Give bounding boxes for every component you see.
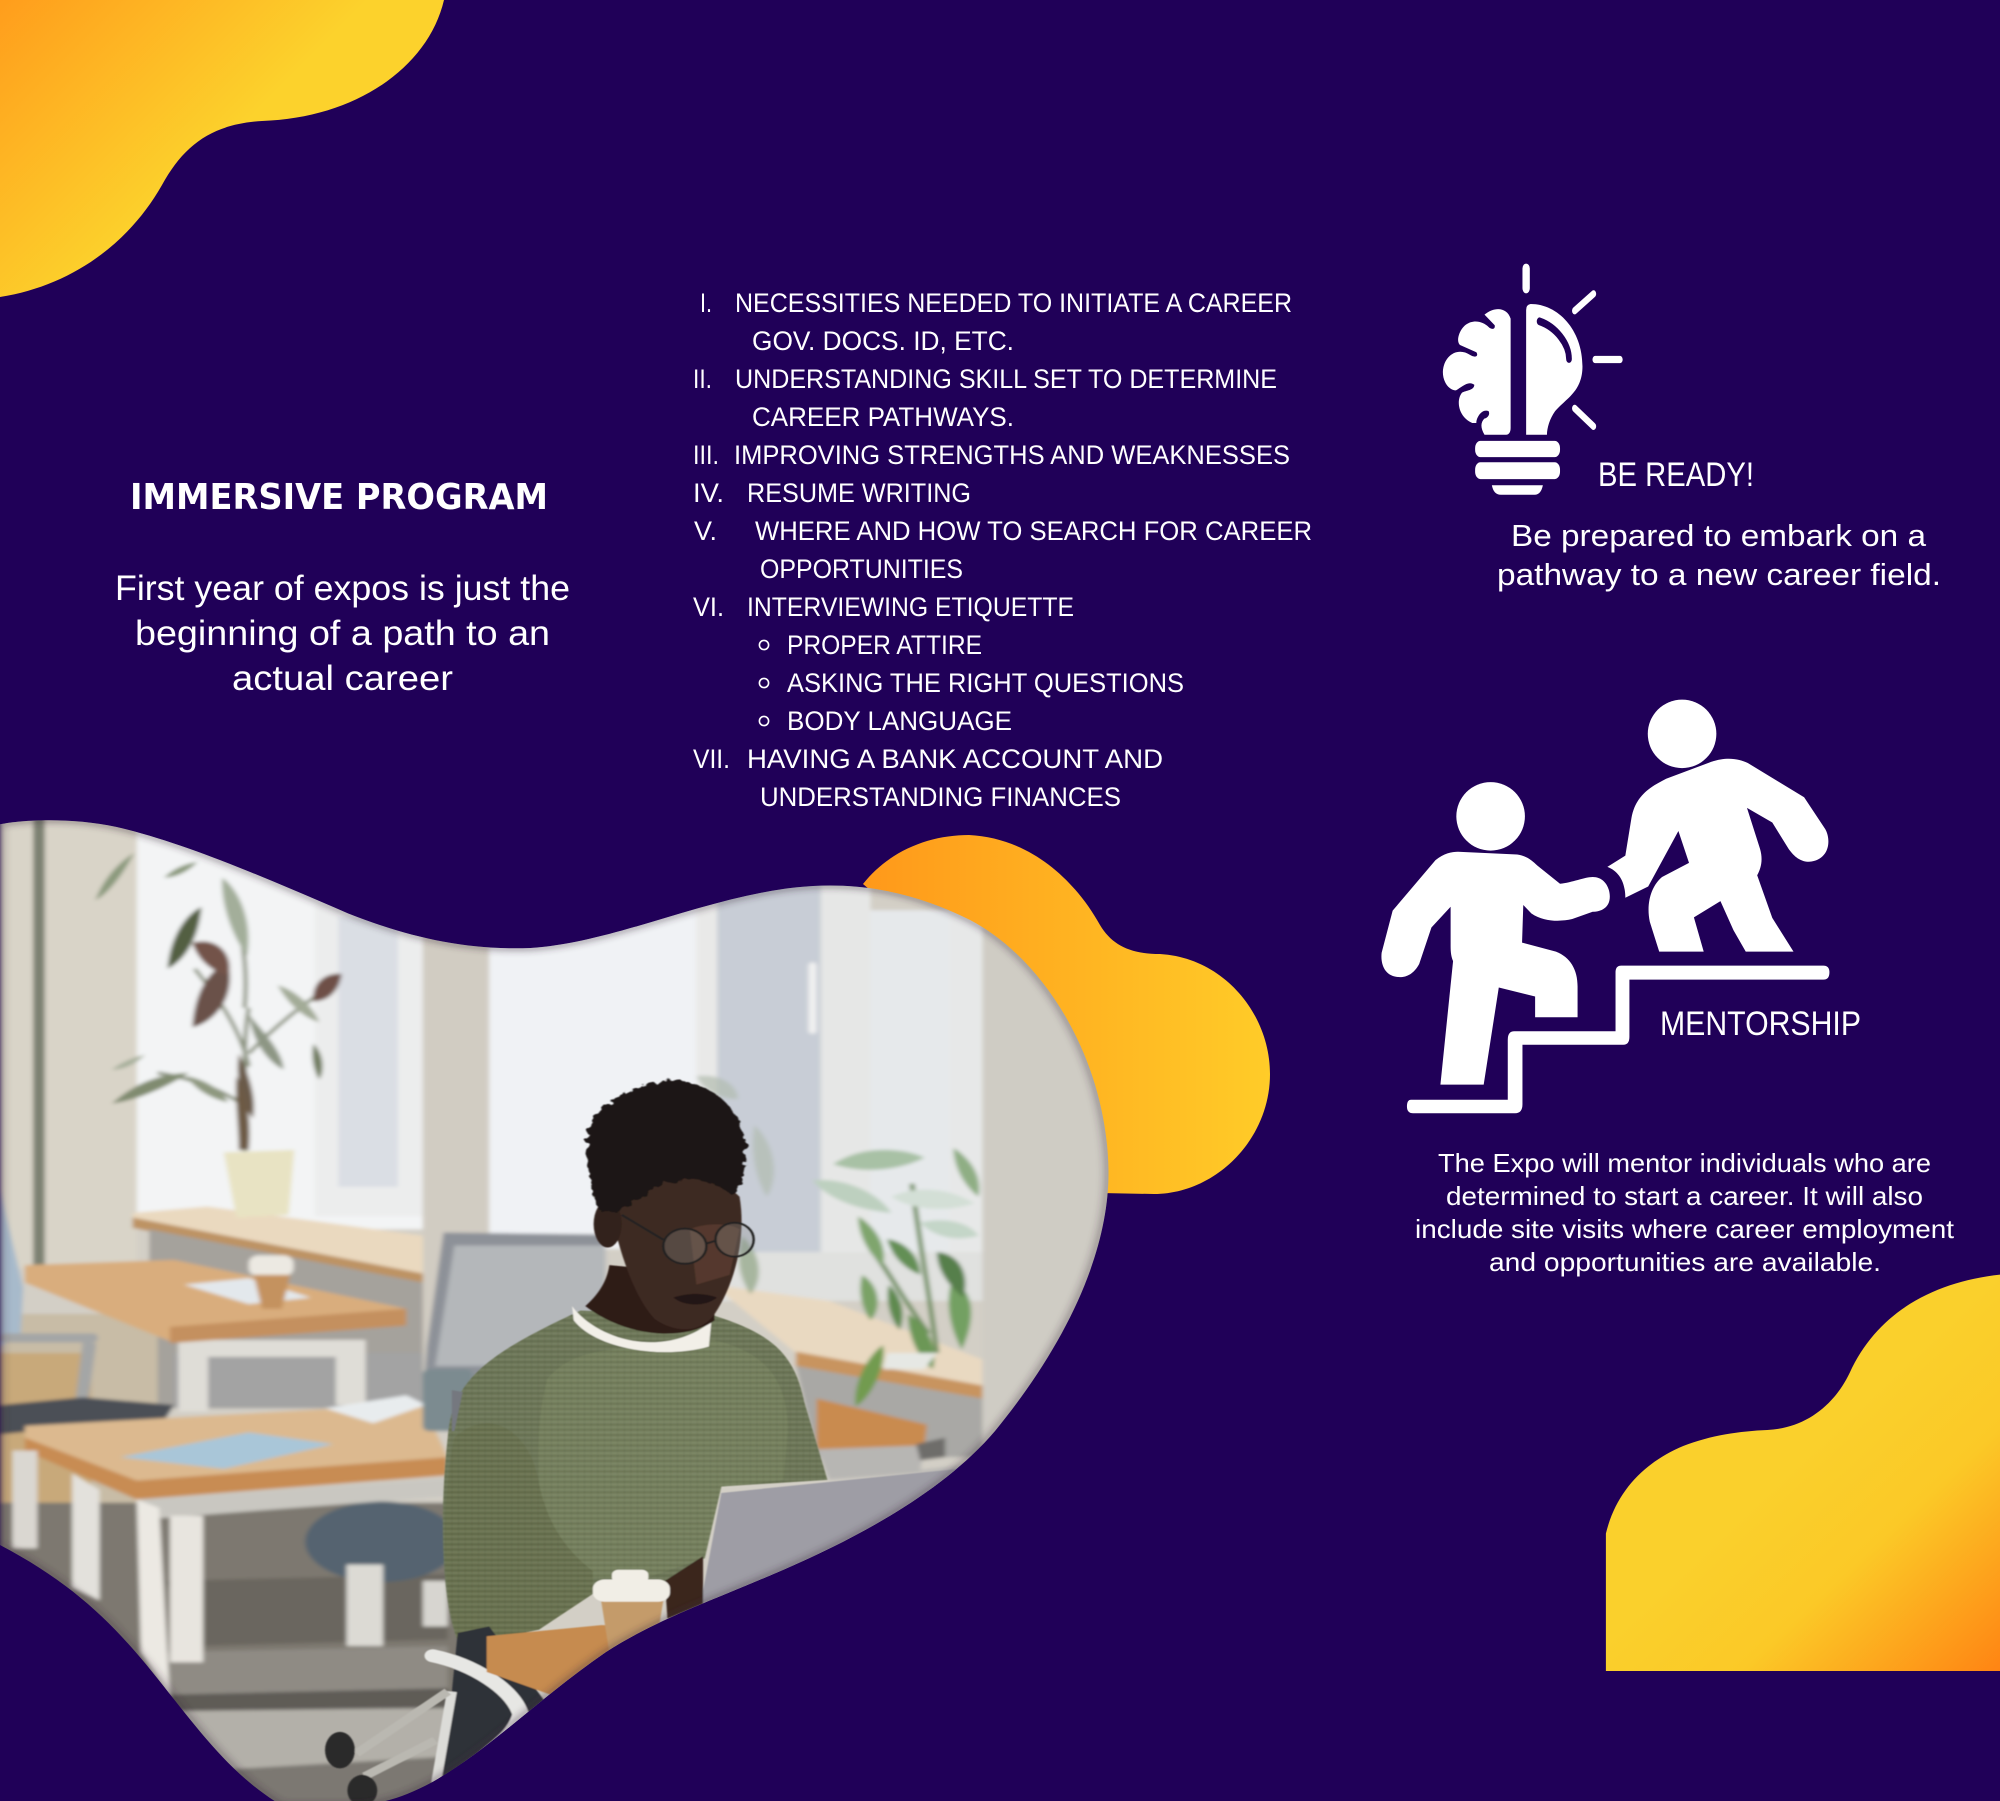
numbered list: career topics: VI. bbox=[693, 592, 724, 622]
label: mentorship: MENTORSHIP bbox=[1660, 1005, 1861, 1043]
numbered list: career topics: BODY LANGUAGE bbox=[787, 706, 1012, 736]
photo: soft inner edge shadow bbox=[0, 820, 1109, 1801]
numbered list: career topics: NECESSITIES NEEDED TO INITIATE A CAREER bbox=[735, 288, 1292, 318]
text block: mentorship description: include site visits where career employment bbox=[1415, 1214, 1955, 1244]
text block: mentorship description: The Expo will mentor individuals who are bbox=[1438, 1148, 1931, 1178]
text block: first year description: actual career bbox=[232, 659, 453, 698]
text block: be prepared: Be prepared to embark on a bbox=[1511, 518, 1927, 553]
text block: first year description: First year of expos is just the bbox=[115, 569, 570, 608]
numbered list: career topics: PROPER ATTIRE bbox=[787, 630, 982, 660]
numbered list: career topics: GOV. DOCS. ID, ETC. bbox=[752, 326, 1014, 356]
photo detail: man's sweater bbox=[443, 1311, 827, 1646]
numbered list: career topics: VII. bbox=[693, 744, 730, 774]
numbered list: career topics: ASKING THE RIGHT QUESTIONS bbox=[787, 668, 1184, 698]
photo detail: coffee cup bbox=[600, 1600, 664, 1650]
decorative blob: bottom right bbox=[1606, 1275, 2000, 1671]
numbered list: career topics: V. bbox=[694, 516, 717, 546]
label: be ready: BE READY! bbox=[1598, 456, 1754, 494]
numbered list: career topics: OPPORTUNITIES bbox=[760, 554, 963, 584]
photo detail: man's neck and collar bbox=[572, 1306, 711, 1352]
photo detail: office chair behind the desk bbox=[439, 1626, 547, 1786]
text block: mentorship description: and opportunities are available. bbox=[1489, 1247, 1881, 1277]
numbered list: career topics: WHERE AND HOW TO SEARCH FOR CAREER bbox=[755, 516, 1312, 546]
numbered list: career topics bbox=[693, 288, 1312, 812]
text block: first year description bbox=[115, 569, 570, 698]
photo detail: window plant left bbox=[95, 853, 342, 1151]
text block: be prepared bbox=[1497, 518, 1941, 592]
decorative blob: behind photo bbox=[863, 835, 1270, 1194]
numbered list: career topics: II. bbox=[693, 364, 712, 394]
decorative blob: top left bbox=[0, 0, 444, 297]
numbered list: career topics: UNDERSTANDING SKILL SET TO DETERMINE bbox=[735, 364, 1277, 394]
text block: first year description: beginning of a path to an bbox=[135, 614, 550, 653]
numbered list: career topics: IMPROVING STRENGTHS AND WEAKNESSES bbox=[734, 440, 1290, 470]
photo detail: desk foreground bbox=[486, 1624, 610, 1695]
text block: be prepared: pathway to a new career field. bbox=[1497, 557, 1941, 592]
photo: man working on a laptop in an office bbox=[0, 780, 1161, 1801]
numbered list: career topics: RESUME WRITING bbox=[747, 478, 971, 508]
numbered list: career topics: CAREER PATHWAYS. bbox=[752, 402, 1014, 432]
photo detail: chair base and castors bbox=[357, 1692, 448, 1776]
text block: mentorship description: determined to start a career. It will also bbox=[1446, 1181, 1923, 1211]
numbered list: career topics: UNDERSTANDING FINANCES bbox=[760, 782, 1121, 812]
numbered list: career topics: INTERVIEWING ETIQUETTE bbox=[747, 592, 1074, 622]
heading: immersive program: IMMERSIVE PROGRAM bbox=[130, 477, 548, 518]
numbered list: career topics: III. bbox=[693, 440, 719, 470]
photo detail: faint plant behind the man bbox=[696, 1076, 774, 1294]
photo detail: window plant right bbox=[813, 1148, 979, 1406]
photo detail: man's head bbox=[609, 1178, 742, 1329]
numbered list: career topics: IV. bbox=[693, 478, 724, 508]
photo detail: floor bbox=[0, 1503, 464, 1801]
icon: light bulb with brain bbox=[1443, 264, 1620, 495]
icon: mentor helping person up stairs bbox=[1381, 700, 1829, 1113]
numbered list: career topics: HAVING A BANK ACCOUNT AND bbox=[747, 744, 1163, 774]
text block: mentorship description bbox=[1415, 1148, 1955, 1277]
photo detail: laptop bbox=[701, 1469, 958, 1604]
photo detail: glasses bbox=[622, 1215, 754, 1264]
numbered list: career topics: I. bbox=[700, 288, 712, 318]
